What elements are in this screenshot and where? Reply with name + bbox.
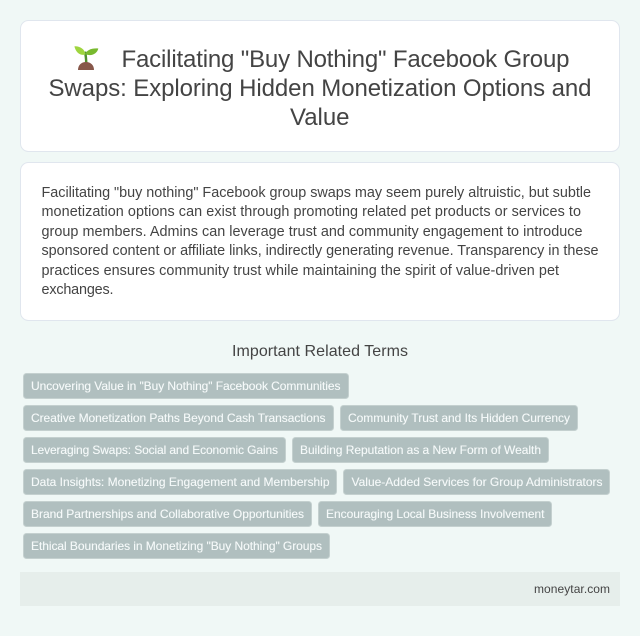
heading: important related terms: Important Related Terms [232, 343, 408, 360]
tag: Creative Monetization Paths Beyond Cash Transactions [31, 411, 326, 425]
footer [20, 572, 620, 606]
tag [318, 502, 552, 526]
title: Facilitating "Buy Nothing" Facebook Group [122, 46, 570, 73]
title: Swaps: Exploring Hidden Monetization Options and [48, 75, 592, 102]
icon: sprout [74, 46, 98, 70]
tag: Community Trust and Its Hidden Currency [348, 411, 570, 425]
tag [340, 406, 578, 430]
tag: Uncovering Value in "Buy Nothing" Facebook Communities [31, 379, 340, 393]
tag [24, 374, 348, 398]
tag [24, 438, 286, 462]
description text: exchanges. [42, 282, 114, 298]
title [48, 46, 592, 131]
tag [24, 534, 330, 558]
footer: moneytar.com [534, 582, 610, 596]
tag: Ethical Boundaries in Monetizing "Buy Nothing" Groups [31, 539, 322, 553]
tag: Data Insights: Monetizing Engagement and Membership [31, 475, 330, 489]
tag [24, 406, 334, 430]
tag: Building Reputation as a New Form of Wealth [300, 443, 541, 457]
panel: description [20, 162, 620, 320]
tag: Brand Partnerships and Collaborative Opportunities [31, 507, 304, 521]
panel: title card [20, 20, 620, 152]
tag [344, 470, 610, 494]
description text: Facilitating "buy nothing" Facebook group swaps may seem purely altruistic, but subtle [42, 185, 591, 201]
tag: Value-Added Services for Group Administrators [352, 475, 602, 489]
tag: Leveraging Swaps: Social and Economic Gains [31, 443, 278, 457]
tag: Encouraging Local Business Involvement [326, 507, 545, 521]
title: Value [290, 104, 350, 131]
tag [24, 470, 336, 494]
description text: sponsored content or affiliate links, indirectly generating revenue. Transparency in these [42, 243, 598, 259]
description text [42, 185, 598, 298]
tag list [24, 374, 610, 558]
description text: monetization options can exist through promoting related pet products or services to [42, 204, 581, 220]
description text: group members. Admins can leverage trust and community engagement to introduce [42, 224, 582, 240]
tag [24, 502, 312, 526]
description text: practices ensures community trust while maintaining the spirit of value-driven pet [42, 263, 559, 279]
tag [292, 438, 548, 462]
